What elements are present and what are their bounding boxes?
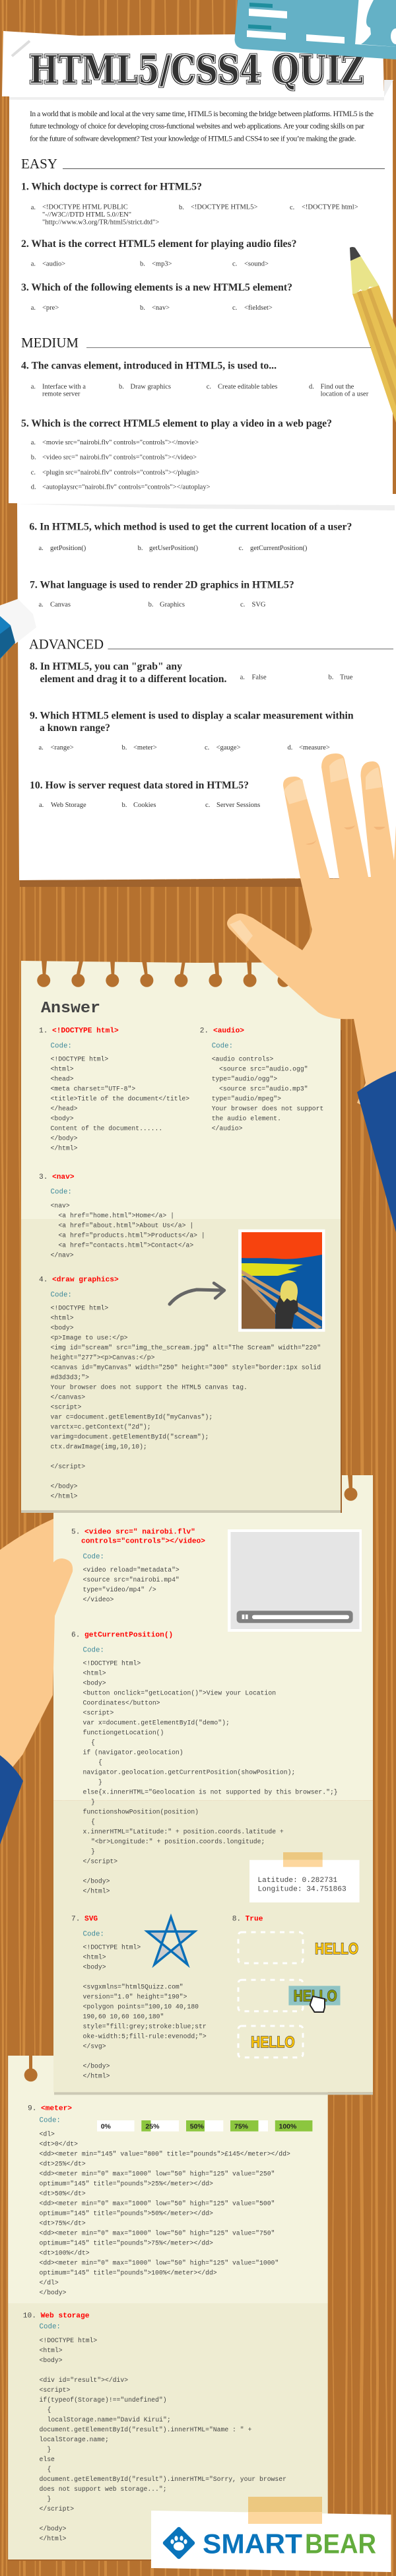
question 6: getCurrentPosition() bbox=[250, 545, 308, 552]
question 8: 8. In HTML5, you can "grab" any bbox=[30, 661, 182, 672]
answer 9: </body> bbox=[40, 2289, 67, 2296]
question 10: Server Sessions bbox=[216, 802, 260, 809]
answer 1: <!DOCTYPE html> bbox=[50, 1056, 108, 1063]
question 1 bbox=[21, 181, 358, 226]
question 3 bbox=[21, 282, 292, 312]
answer 2: Code: bbox=[212, 1043, 233, 1051]
answer 6: <!DOCTYPE html> bbox=[83, 1660, 141, 1667]
question 8: False bbox=[252, 674, 267, 681]
answer 5: Code: bbox=[83, 1553, 104, 1561]
question 4: b. bbox=[119, 383, 124, 390]
image: The Scream canvas drawing bbox=[238, 1230, 325, 1332]
question 10: Cookies bbox=[133, 802, 156, 809]
panel: answer sheet part 1 (answers 1 to 4) bbox=[21, 961, 342, 1513]
panel: quiz paper page 2 bbox=[17, 494, 396, 887]
question 4: a. bbox=[31, 383, 36, 390]
answer 5: <video src=" nairobi.flv" bbox=[84, 1529, 195, 1537]
answer 4: <draw graphics> bbox=[52, 1276, 119, 1284]
answer 4: <p>Image to use:</p> bbox=[50, 1334, 128, 1341]
answer 10: } bbox=[48, 2446, 51, 2453]
panel: title strip bbox=[2, 31, 393, 100]
answer 10: } bbox=[48, 2495, 51, 2503]
question 3: <fieldset> bbox=[244, 304, 273, 312]
answer 6: else{x.innerHTML="Geolocation is not supported by this browser.";} bbox=[83, 1789, 338, 1796]
question 1: <!DOCTYPE HTML PUBLIC bbox=[42, 204, 128, 211]
note: taped coordinates: Latitude: 0.282731 bbox=[257, 1877, 338, 1885]
answer 6: { bbox=[91, 1739, 95, 1747]
answer 4: var c=document.getElementById("myCanvas"); bbox=[50, 1413, 213, 1420]
note: taped coordinates bbox=[249, 1852, 360, 1902]
answer 9: 9. bbox=[28, 2105, 36, 2113]
answer 3: <nav> bbox=[52, 1173, 75, 1181]
answer 4: <!DOCTYPE html> bbox=[50, 1304, 108, 1311]
question 5: c. bbox=[31, 469, 36, 476]
answer 4: height="277"><p>Canvas:</p> bbox=[50, 1354, 155, 1361]
answer 2 bbox=[200, 1027, 323, 1132]
illustration: left hand bbox=[0, 1519, 73, 1844]
question 1: 1. Which doctype is correct for HTML5? bbox=[21, 181, 202, 192]
intro paragraph: for the future of software development? Test your knowledge of HTML5 and CSS4 to see if you’re making the grade. bbox=[30, 134, 356, 143]
answer 8: drag and drop illustration: HELLO bbox=[315, 1940, 358, 1958]
answer 9: <dd><meter min="0" max="1000" low="50" high="125" value="750" bbox=[40, 2229, 275, 2237]
answer 7: oke-width:5;fill-rule:evenodd;"> bbox=[83, 2033, 207, 2040]
answer 7: SVG bbox=[84, 1916, 98, 1924]
answer 9: Code: bbox=[40, 2116, 61, 2124]
answer 10: document.getElementById("result").innerHTML="Name : " + bbox=[40, 2426, 251, 2433]
question 4: c. bbox=[207, 383, 211, 390]
illustration: right hand bbox=[227, 753, 396, 1232]
answer 7 bbox=[71, 1916, 207, 2080]
question 5: 5. Which is the correct HTML5 element to play a video in a web page? bbox=[21, 418, 332, 429]
question 4: location of a user bbox=[321, 391, 369, 398]
answer 8: drag and drop illustration bbox=[232, 1916, 358, 2058]
answer 7: <polygon points="100,10 40,180 bbox=[83, 2003, 199, 2011]
answer 1: <head> bbox=[50, 1076, 74, 1083]
logo card: SmartBear: SMART bbox=[203, 2528, 302, 2559]
answer 10: <html> bbox=[40, 2347, 63, 2354]
answer 4: 4. bbox=[39, 1276, 48, 1284]
answer 10: does not support web storage..."; bbox=[40, 2486, 167, 2493]
answer 10: 10. bbox=[23, 2312, 36, 2320]
answer 10: if(typeof(Storage)!=="undefined") bbox=[40, 2396, 167, 2404]
question 6: c. bbox=[239, 545, 244, 552]
answer 1: <meta charset="UTF-8"> bbox=[50, 1086, 135, 1093]
question 10: 10. How is server request data stored in HTML5? bbox=[30, 780, 249, 791]
answer 9: <dt>100%</dt> bbox=[40, 2249, 90, 2256]
answer 2: 2. bbox=[200, 1027, 209, 1035]
answer 3: Code: bbox=[50, 1189, 72, 1197]
answer 7: 190,60 10,60 160,180" bbox=[83, 2013, 164, 2021]
answer 10: </body> bbox=[40, 2525, 67, 2532]
answer 9 bbox=[28, 2105, 290, 2296]
answer 4: </html> bbox=[50, 1492, 78, 1500]
answer 3: <a href="contacts.html">Contact</a> bbox=[58, 1241, 193, 1249]
question 6 bbox=[29, 522, 352, 552]
answer 9: optimum="145" title="pounds">50%</meter></dd> bbox=[40, 2210, 213, 2217]
question 2: <mp3> bbox=[152, 260, 172, 267]
answer 1: </html> bbox=[50, 1145, 78, 1152]
answer 10 bbox=[23, 2312, 286, 2542]
answer 10: localStorage.name; bbox=[40, 2436, 109, 2443]
answer 9: <dt>0</dt> bbox=[40, 2140, 78, 2147]
answer 4: </script> bbox=[50, 1463, 85, 1470]
question 4: d. bbox=[309, 383, 314, 390]
answer 5 bbox=[71, 1529, 205, 1603]
answer 9: <dd><meter min="145" value="800" title="pounds">£145</meter></dd> bbox=[40, 2150, 290, 2157]
answer 6: 6. bbox=[71, 1632, 80, 1640]
answer 4: <body> bbox=[50, 1324, 74, 1331]
question 3: a. bbox=[31, 304, 36, 312]
video player illustration bbox=[228, 1529, 362, 1632]
answer 7: version="1.0" height="190"> bbox=[83, 1994, 187, 2001]
answer 9: <meter> bbox=[41, 2105, 72, 2113]
question 4: remote server bbox=[42, 391, 81, 398]
answer 7: </body> bbox=[83, 2063, 110, 2070]
answer 6: } bbox=[91, 1848, 95, 1856]
answer 9: optimum="145" title="pounds">25%</meter></dd> bbox=[40, 2180, 213, 2187]
answer 5: type="video/mp4" /> bbox=[83, 1586, 156, 1593]
question 5: <video src=" nairobi.flv" controls="controls"></video> bbox=[42, 454, 197, 462]
question 6: a. bbox=[38, 545, 44, 552]
logo card: SmartBear bbox=[151, 2497, 391, 2572]
answer 1: </body> bbox=[50, 1135, 78, 1142]
answer 3: <a href="home.html">Home</a> | bbox=[58, 1212, 174, 1219]
icon: pencil bbox=[350, 247, 396, 423]
answer 2: <audio> bbox=[213, 1027, 244, 1035]
question 4 bbox=[21, 360, 369, 398]
question 9: <measure> bbox=[299, 744, 330, 751]
answer 7: <body> bbox=[83, 1964, 106, 1971]
question 3: b. bbox=[140, 304, 145, 312]
chart: meter bars bbox=[97, 2120, 312, 2132]
answer 6 bbox=[71, 1632, 338, 1895]
answer 7: <!DOCTYPE html> bbox=[83, 1944, 141, 1951]
question 9: a known range? bbox=[40, 722, 110, 734]
chart: meter bars: 50% bbox=[190, 2122, 204, 2130]
answer 4: varctx=c.getContext("2d"); bbox=[50, 1423, 151, 1430]
answer 6: <button onclick="getLocation()">View your Location bbox=[83, 1690, 276, 1697]
answer 5: </video> bbox=[83, 1596, 114, 1603]
question 2 bbox=[21, 238, 296, 267]
answer 4: #d3d3d3;"> bbox=[50, 1374, 89, 1381]
question 6: getPosition() bbox=[50, 545, 86, 552]
heading: Easy: EASY bbox=[21, 156, 57, 172]
question 9: c. bbox=[205, 744, 209, 751]
answer 10: Web storage bbox=[41, 2312, 90, 2320]
heading: Answer: Answer bbox=[41, 1000, 100, 1018]
answer 9: optimum="145" title="pounds">75%</meter></dd> bbox=[40, 2239, 213, 2246]
question 6: getUserPosition() bbox=[149, 545, 199, 552]
chart: meter bars: 100% bbox=[279, 2122, 297, 2130]
question 10 bbox=[30, 780, 260, 809]
answer 6: functiongetLocation() bbox=[83, 1729, 164, 1737]
answer 7: </svg> bbox=[83, 2043, 106, 2050]
answer 1: <!DOCTYPE html> bbox=[52, 1027, 119, 1035]
note: taped coordinates: Longitude: 34.751863 bbox=[257, 1885, 346, 1893]
answer 7: style="fill:grey;stroke:blue;str bbox=[83, 2023, 207, 2031]
answer 7: </html> bbox=[83, 2073, 110, 2080]
answer 4: varimg=document.getElementById("scream"); bbox=[50, 1433, 209, 1440]
question 5: <autoplaysrc="nairobi.flv" controls="controls"></autoplay> bbox=[42, 484, 211, 491]
question 10: b. bbox=[121, 802, 127, 809]
question 9: <gauge> bbox=[216, 744, 241, 751]
answer 2: </audio> bbox=[212, 1125, 243, 1132]
logo card: SmartBear: BEAR bbox=[305, 2528, 376, 2559]
answer 7: Code: bbox=[83, 1930, 104, 1938]
answer 4: <canvas id="myCanvas" width="250" height="300" style="border:1px solid bbox=[50, 1364, 321, 1371]
answer 1: <html> bbox=[50, 1066, 74, 1073]
answer 6: if (navigator.geolocation) bbox=[83, 1749, 183, 1757]
question 7: c. bbox=[240, 602, 245, 609]
answer 9: <dd><meter min="0" max="1000" low="50" high="125" value="500" bbox=[40, 2200, 275, 2207]
question 1: "http://www.w3.org/TR/html5/strict.dtd"> bbox=[42, 219, 159, 226]
answer 4: Your browser does not support the HTML5 canvas tag. bbox=[50, 1383, 248, 1391]
question 9: <meter> bbox=[133, 744, 157, 751]
answer 9: <dd><meter min="0" max="1000" low="50" high="125" value="1000" bbox=[40, 2259, 279, 2266]
icon: star polygon bbox=[147, 1917, 195, 1965]
answer 6: "<br>Longitude:" + position.coords.longitude; bbox=[91, 1838, 265, 1846]
answer 3: </nav> bbox=[50, 1251, 74, 1259]
answer 8: drag and drop illustration: HELLO bbox=[294, 1988, 337, 2005]
answer 6: functionshowPosition(position) bbox=[83, 1809, 199, 1816]
answer 6: } bbox=[98, 1779, 102, 1786]
answer 7: <html> bbox=[83, 1954, 106, 1961]
answer 4: </canvas> bbox=[50, 1393, 85, 1401]
chart: meter bars: 0% bbox=[101, 2122, 112, 2130]
answer 6: </script> bbox=[83, 1858, 117, 1865]
question 3: <pre> bbox=[42, 304, 59, 312]
question 9: a. bbox=[38, 744, 44, 751]
question 6: b. bbox=[138, 545, 143, 552]
question 7 bbox=[30, 580, 294, 609]
question 2: <sound> bbox=[244, 260, 269, 267]
chart: meter bars: 25% bbox=[145, 2122, 160, 2130]
answer 10: <body> bbox=[40, 2357, 63, 2364]
answer 4: Code: bbox=[50, 1291, 72, 1299]
answer 6: { bbox=[91, 1819, 95, 1826]
heading: Medium: MEDIUM bbox=[21, 335, 79, 351]
question 7: b. bbox=[148, 602, 153, 609]
panel: answer sheet part 3 (answers 9 and 10) bbox=[8, 2056, 328, 2561]
answer 4 bbox=[39, 1276, 321, 1500]
answer 7: <svgxmlns="html5Quizz.com" bbox=[83, 1984, 183, 1991]
answer 9: <dt>75%</dt> bbox=[40, 2219, 86, 2227]
question 9: <range> bbox=[50, 744, 74, 751]
answer 3: <nav> bbox=[50, 1202, 70, 1209]
question 8: b. bbox=[329, 674, 333, 681]
question 4: Create editable tables bbox=[218, 383, 277, 390]
answer 5: controls="controls"></video> bbox=[81, 1537, 205, 1545]
icon: eraser bbox=[0, 599, 36, 659]
answer 3: 3. bbox=[39, 1173, 48, 1181]
question 2: b. bbox=[140, 260, 145, 267]
chart: meter bars: 75% bbox=[234, 2122, 249, 2130]
answer 3: <a href="products.html">Products</a> | bbox=[58, 1232, 205, 1239]
question 5: b. bbox=[31, 454, 36, 462]
question 9: b. bbox=[121, 744, 127, 751]
answer 10: { bbox=[48, 2406, 51, 2414]
question 7: SVG bbox=[252, 602, 266, 609]
panel: quiz paper page 1 bbox=[9, 80, 396, 510]
question 5: a. bbox=[31, 439, 36, 446]
question 1: b. bbox=[179, 204, 184, 211]
intro paragraph: future technology of choice for developing cross-functional websites and web applications. Are your coding skills on par bbox=[30, 122, 364, 131]
answer 6: var x=document.getElementById("demo"); bbox=[83, 1720, 230, 1727]
answer 6: Coordinates</button> bbox=[83, 1700, 160, 1707]
answer 5: 5. bbox=[71, 1529, 80, 1537]
answer 2: Your browser does not support bbox=[212, 1105, 323, 1113]
question 1: c. bbox=[290, 204, 294, 211]
panel: answer sheet part 2 (answers 5 to 8) bbox=[53, 1475, 373, 2095]
answer 9: <dt>50%</dt> bbox=[40, 2190, 86, 2197]
question 7: a. bbox=[38, 602, 44, 609]
answer 6: <body> bbox=[83, 1680, 106, 1687]
answer 2: type="audio/mpeg"> bbox=[212, 1096, 281, 1103]
answer 1: Code: bbox=[50, 1043, 72, 1051]
answer 6: </body> bbox=[83, 1878, 110, 1885]
question 3: c. bbox=[232, 304, 237, 312]
arrow: to the drawing bbox=[170, 1283, 224, 1304]
answer 9: <dd><meter min="0" max="1000" low="50" high="125" value="250" bbox=[40, 2170, 275, 2177]
answer 4: <html> bbox=[50, 1314, 74, 1321]
answer 1: Content of the document...... bbox=[50, 1125, 162, 1132]
question 2: <audio> bbox=[42, 260, 65, 267]
question 7: 7. What language is used to render 2D graphics in HTML5? bbox=[30, 580, 294, 591]
answer 10: Code: bbox=[40, 2323, 61, 2331]
question 8: True bbox=[340, 674, 353, 681]
question 8: element and drag it to a different location. bbox=[40, 674, 227, 685]
answer 10: { bbox=[48, 2466, 51, 2473]
question 2: 2. What is the correct HTML5 element for playing audio files? bbox=[21, 238, 296, 250]
answer 2: <audio controls> bbox=[212, 1056, 273, 1063]
question 4: Find out the bbox=[321, 383, 354, 390]
answer 6: </html> bbox=[83, 1888, 110, 1895]
answer 1: <body> bbox=[50, 1115, 74, 1123]
answer 5: <video reload="metadata"> bbox=[83, 1566, 180, 1574]
answer 6: <script> bbox=[83, 1710, 114, 1717]
answer 5: <source src="nairobi.mp4" bbox=[83, 1576, 180, 1584]
answer 6: } bbox=[91, 1799, 95, 1806]
answer 4: </body> bbox=[50, 1482, 78, 1490]
answer 3 bbox=[39, 1173, 205, 1259]
tape: grey mark bbox=[12, 41, 30, 56]
answer 10: <script> bbox=[40, 2386, 70, 2394]
question 8: a. bbox=[240, 674, 245, 681]
answer 6: Code: bbox=[83, 1647, 104, 1655]
answer 6: x.innerHTML="Latitude:" + position.coords.latitude + bbox=[83, 1828, 284, 1836]
question 4: 4. The canvas element, introduced in HTML5, is used to... bbox=[21, 360, 277, 371]
question 10: Web Storage bbox=[51, 802, 86, 809]
answer 2: <source src="audio.mp3" bbox=[219, 1086, 308, 1093]
question 9: d. bbox=[288, 744, 292, 751]
question 2: a. bbox=[31, 260, 36, 267]
answer 7: 7. bbox=[71, 1916, 80, 1924]
answer 9: optimum="145" title="pounds">100%</meter></dd> bbox=[40, 2269, 217, 2276]
question 9 bbox=[30, 710, 354, 751]
question 3: <nav> bbox=[152, 304, 170, 312]
icon: blue ID card bbox=[235, 0, 396, 59]
question 10: c. bbox=[205, 802, 210, 809]
question 7: Graphics bbox=[160, 602, 185, 609]
question 1: a. bbox=[31, 204, 36, 211]
answer 6: <html> bbox=[83, 1670, 106, 1677]
question 5: d. bbox=[31, 484, 36, 491]
answer 10: <div id="result"></div> bbox=[40, 2377, 128, 2384]
question 5: <plugin src="nairobi.flv" controls="controls"></plugin> bbox=[42, 469, 199, 476]
answer 1: 1. bbox=[39, 1027, 48, 1035]
question 7: Canvas bbox=[50, 602, 71, 609]
icon: paw diamond bbox=[162, 2526, 195, 2559]
question 1: <!DOCTYPE HTML5> bbox=[191, 204, 257, 211]
question 4: Interface with a bbox=[42, 383, 86, 390]
question 10: a. bbox=[39, 802, 44, 809]
question 5: <movie src="nairobi.flv" controls="controls"></movie> bbox=[42, 439, 199, 446]
question 4: Draw graphics bbox=[131, 383, 171, 390]
question 8 bbox=[30, 661, 353, 685]
notebook holes bbox=[37, 961, 290, 987]
intro paragraph bbox=[30, 110, 374, 143]
answer 10: <!DOCTYPE html> bbox=[40, 2337, 97, 2344]
intro paragraph: In a world that is mobile and local at the very same time, HTML5 is becoming the bridge between platforms. HTML5 is the bbox=[30, 110, 374, 118]
answer 4: <img id="scream" src="img_the_scream.jpg" alt="The Scream" width="220" bbox=[50, 1344, 321, 1351]
answer 4: ctx.drawImage(img,10,10); bbox=[50, 1443, 147, 1450]
answer 10: document.getElementById("result").innerHTML="Sorry, your browser bbox=[40, 2476, 286, 2483]
answer 6: getCurrentPosition() bbox=[84, 1632, 173, 1640]
answer 2: the audio element. bbox=[212, 1115, 281, 1123]
answer 10: localStorage.name="David Kirui"; bbox=[48, 2416, 171, 2423]
answer 10: else bbox=[40, 2456, 55, 2463]
question 2: c. bbox=[232, 260, 237, 267]
answer 2: type="audio/ogg"> bbox=[212, 1076, 277, 1083]
answer 1 bbox=[39, 1027, 189, 1152]
question 1: "-//W3C//DTD HTML 5.0//EN" bbox=[42, 211, 131, 219]
answer 6: navigator.geolocation.getCurrentPosition(showPosition); bbox=[83, 1769, 295, 1776]
answer 9: <dl> bbox=[40, 2130, 55, 2138]
answer 2: <source src="audio.ogg" bbox=[219, 1066, 308, 1073]
answer 3: <a href="about.html">About Us</a> | bbox=[58, 1222, 193, 1229]
answer 9: </dl> bbox=[40, 2279, 59, 2286]
question 5 bbox=[21, 418, 332, 491]
answer 6: { bbox=[98, 1759, 102, 1766]
question 9: 9. Which HTML5 element is used to display a scalar measurement within bbox=[30, 710, 354, 721]
answer 8: drag and drop illustration: True bbox=[246, 1916, 263, 1924]
answer 1: </head> bbox=[50, 1105, 78, 1113]
heading: Advanced: ADVANCED bbox=[29, 636, 104, 652]
answer 10: </html> bbox=[40, 2535, 67, 2542]
answer 1: <title>Title of the document</title> bbox=[50, 1096, 189, 1103]
answer 8: drag and drop illustration: HELLO bbox=[251, 2034, 295, 2052]
answer 10: </script> bbox=[40, 2505, 74, 2513]
question 1: <!DOCTYPE html> bbox=[302, 204, 358, 211]
question 3: 3. Which of the following elements is a new HTML5 element? bbox=[21, 282, 292, 293]
question 6: 6. In HTML5, which method is used to get the current location of a user? bbox=[29, 522, 352, 533]
answer 4: <script> bbox=[50, 1403, 81, 1410]
answer 8: drag and drop illustration: 8. bbox=[232, 1916, 241, 1924]
answer 9: <dt>25%</dt> bbox=[40, 2160, 86, 2167]
